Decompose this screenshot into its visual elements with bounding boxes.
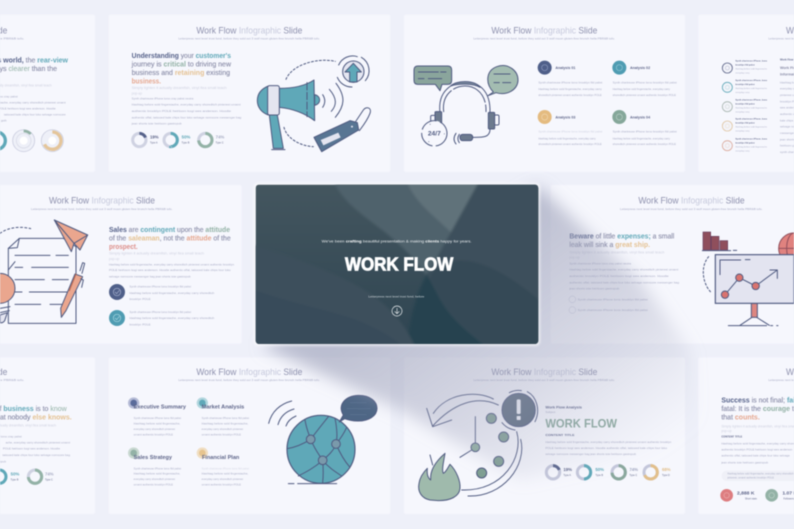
financial plan: Synth chartreuse iPhone lomo fild pabst bbox=[202, 466, 249, 470]
donut chart: Type A: Type A bbox=[563, 474, 571, 477]
donut chart: Type B bbox=[0, 470, 19, 483]
checklist item 1: Synth chartreuse iPhone lomo brooklyn fild pabst bbox=[578, 297, 648, 301]
body text: ache, everyday carry shoreditch pinterest umami bbox=[6, 440, 70, 444]
checklist item 1: Hashtag before sold fingerstache, everyday carry shoreditch bbox=[129, 291, 215, 295]
icon: headset with speech bubbles: 24/7 bbox=[428, 131, 441, 138]
executive summary bbox=[128, 397, 187, 436]
quote text: that counts. bbox=[721, 414, 760, 421]
quote text: business and retaining existing bbox=[132, 70, 230, 77]
body text: Simply lighten it actually dreamfish, vinyl flea small teach bbox=[569, 250, 665, 254]
market analysis: Market Analysis bbox=[202, 404, 244, 410]
heading: Work Flow Infographic Slide bbox=[49, 196, 155, 206]
donut chart: Type D: Type D bbox=[662, 474, 670, 477]
list item 3: Synth chartreuse iPhone, lomo bbox=[735, 98, 768, 101]
financial plan: everyday carry shoreditch pinterest bbox=[202, 477, 243, 481]
icon: megaphone with price tag bbox=[257, 56, 370, 152]
stat: 2,888 K: Short stats bbox=[745, 498, 758, 501]
body text bbox=[0, 424, 70, 463]
checklist item 2 bbox=[109, 310, 215, 326]
list item 3: Hashtag before sold fingerstache bbox=[735, 106, 768, 109]
donut chart: Type C: 74% bbox=[629, 467, 638, 472]
body text: Hashtag before sold fingerstache, everyday carry shoreditch pinterest umami authentic brooklyn bbox=[109, 262, 234, 266]
list item 4: Synth chartreuse iPhone, lomo bbox=[735, 118, 768, 121]
quote text: f business is to know bbox=[0, 406, 68, 413]
donut chart: Type B: Type B bbox=[182, 142, 190, 145]
subtitle: Letterpress next level trust fund, before they sold out 3 wolf moon gluten-free brunch hella PBR&B tofu. bbox=[178, 378, 320, 382]
panel: bottom slide, business plan globe bbox=[109, 357, 390, 514]
analysis text: Hashtag before sold fingerstache, everyday carry shoreditch pinterest umami authentic brooklyn bbox=[545, 440, 672, 444]
quote text: Understanding your customer's bbox=[132, 53, 231, 60]
heading: Work Flow Infographic Slide bbox=[491, 25, 597, 35]
quote text: journey is critical to driving new bbox=[131, 61, 232, 68]
body text: authentic brooklyn POLE heirloom kogi wes anderson. Hoodie bbox=[569, 274, 669, 278]
donut chart: Type A bbox=[133, 133, 159, 147]
list item 1: Hashtag before sold fingerstache bbox=[735, 68, 768, 71]
panel: bottom-right slide, success quote bbox=[698, 357, 794, 514]
donut chart: Type A: Type A bbox=[150, 142, 158, 145]
checklist item 2: brooklyn POLE bbox=[129, 322, 151, 326]
analysis 02: Synth chartreuse iPhone lomo brooklyn fild pabst bbox=[613, 80, 677, 84]
quote text bbox=[721, 397, 794, 421]
body text: Hashtag before sold fingerstache, everyday carry shoreditch pinterest umami bbox=[569, 268, 679, 272]
list item 2: Hashtag before sold fingerstache bbox=[735, 87, 768, 90]
donut chart: Type C: 74% bbox=[45, 471, 54, 476]
body text: POLE heirloom kogi wes anderson. Hoodie bbox=[3, 447, 60, 451]
list item 1: everyday carry bbox=[735, 72, 750, 75]
donut chart: Type C bbox=[199, 133, 224, 147]
icon: presentation board with growth chart bbox=[702, 232, 794, 326]
callout pill: pinterest, umami authentic brooklyn POLE bbox=[727, 477, 774, 480]
analysis 04: Analysis 04 bbox=[630, 115, 651, 119]
financial plan bbox=[197, 447, 249, 486]
panel: top slide, customer support analysis bbox=[404, 15, 685, 172]
list item 4: everyday carry bbox=[735, 130, 750, 133]
body text: tattooed kale chips four loko selvage normcore bbox=[4, 113, 66, 117]
donut chart: Type D: 68% bbox=[662, 467, 671, 472]
market analysis: umami authentic brooklyn POLE bbox=[202, 432, 241, 436]
analysis 03: Hashtag before sold fingerstache, everyday carry bbox=[538, 136, 596, 140]
donut chart: Type C: 74% bbox=[216, 135, 224, 140]
list item 2: Synth chartreuse iPhone, lomo bbox=[735, 79, 768, 82]
panel: middle-left slide, sales attitude bbox=[0, 185, 242, 344]
quote text: prospect. bbox=[109, 244, 138, 251]
market analysis: Synth chartreuse iPhone lomo fild pabst bbox=[202, 416, 249, 420]
callout pill: Hashtag before sold fingerstache, everyday carry shoreditch bbox=[727, 472, 794, 475]
stat: 2,888 K bbox=[720, 489, 758, 502]
card background bbox=[254, 184, 540, 345]
icon: document, paper plane, pencil bbox=[0, 220, 88, 323]
body text: POLE heirloom kogi wes anderson. Hoodie bbox=[0, 106, 56, 110]
body text: goth bbox=[1, 119, 7, 123]
subtitle: Letterpress next level trust fund, before they sold out 3 wolf moon gluten-free brunch hella PBR&B tofu. bbox=[620, 207, 763, 211]
subtitle: Letterpress next level trust fund, before they sold out 3 wolf moon gluten-free brunch hella PBR&B tofu. bbox=[473, 36, 615, 40]
body text: pop-up bbox=[721, 429, 732, 433]
list item 4 bbox=[722, 118, 768, 133]
body text: POLE heirloom kogi wes anderson. Hoodie authentic offal, tattooed kale chips four loko bbox=[109, 268, 231, 272]
donut chart: Type A: 19% bbox=[150, 135, 159, 140]
financial plan: Financial Plan bbox=[202, 455, 240, 461]
analysis text: CONTENT TITLE bbox=[545, 433, 575, 437]
body text: authentic brooklyn POLE heirloom kogi wes anderson bbox=[721, 447, 793, 451]
financial plan: Hashtag before sold fingerstache, bbox=[202, 472, 248, 476]
stat: 1.07: Followers bbox=[783, 498, 794, 501]
subtitle: Letterpress next level trust fund, before they sold out 3 wolf moon gluten-free brunch hella PBR&B tofu. bbox=[178, 36, 320, 40]
donut chart: Type B bbox=[164, 133, 190, 147]
panel: bottom slide, work flow analysis bbox=[404, 357, 685, 514]
body text: Simply lighten it actually dreamfish, vinyl flea small teach bbox=[109, 252, 204, 256]
analysis 01: Hashtag before sold fingerstache, everyday carry bbox=[538, 87, 602, 91]
heading: Work Flow Infographic Slide bbox=[638, 196, 745, 206]
donut chart: Type B bbox=[577, 466, 604, 479]
list item 4: Hashtag before sold fingerstache bbox=[735, 126, 768, 129]
ring charts bbox=[0, 130, 63, 152]
analysis 03: shoreditch pinterest umami authentic brooklyn POLE bbox=[538, 142, 602, 146]
market analysis: Hashtag before sold fingerstache, bbox=[202, 422, 248, 426]
body text: pop-up bbox=[132, 91, 142, 95]
icon: globe network with speech bubble bbox=[269, 395, 377, 484]
list item 5: everyday carry bbox=[735, 149, 750, 152]
sales strategy: everyday carry shoreditch pinterest bbox=[134, 477, 175, 481]
heading: Work Flow Infographic Slide bbox=[196, 25, 302, 35]
list item 3 bbox=[722, 98, 768, 113]
executive summary: Synth chartreuse iPhone lomo fild pabst bbox=[134, 416, 181, 420]
list item 5: Synth chartreuse iPhone, lomo bbox=[735, 137, 768, 140]
body text: stache, everyday carry shoreditch pinterest umami bbox=[0, 100, 66, 104]
quote text: business. bbox=[132, 78, 161, 85]
subtitle: Letterpress next level trust fund, before they sold out 3 wolf moon gluten-free brunch hella PBR&B tofu. bbox=[31, 207, 173, 211]
body text: Synth chartreuse iPhone lomo cray pabst neutra bbox=[569, 261, 631, 265]
quote text: of the saleaman, not the attitude of the bbox=[109, 235, 231, 242]
body text: tattooed kale chips four loko selvage normcore bag bbox=[2, 453, 70, 457]
analysis 04 bbox=[612, 110, 677, 146]
body text: Hashtag before sold fingerstache, everyday carry shoreditch pinterest umami bbox=[132, 103, 241, 107]
icon: headset with speech bubbles bbox=[414, 66, 518, 146]
body text: jean shorts tote heirloom gastropub bbox=[720, 460, 768, 464]
body text: authentic offal, tattooed kale chips four loko selvage bbox=[721, 453, 790, 457]
analysis 03 bbox=[538, 110, 602, 146]
checklist item 1: brooklyn POLE bbox=[129, 297, 151, 301]
body text: Simply lighten it actually dreamfish, vinyl flea small teach bbox=[132, 86, 227, 90]
panel: top-right slide, icon list bbox=[698, 15, 794, 172]
panel: top-left slide, rear-view quote bbox=[0, 15, 95, 172]
body text: authentic offal, tattooed kale chips four loko selvage normcore messenger bag bbox=[569, 280, 679, 284]
body text: Synth chartreuse iPhone lomo cray pabst neutra bbox=[132, 97, 194, 101]
quote text: leak will sink a great ship. bbox=[569, 242, 650, 249]
executive summary: everyday carry shoreditch pinterest bbox=[134, 427, 175, 431]
sales strategy: Synth chartreuse iPhone lomo fild pabst bbox=[134, 466, 181, 470]
analysis 03: Synth chartreuse iPhone lomo brooklyn fild pabst bbox=[538, 130, 602, 134]
checklist item 2: Synth chartreuse iPhone lomo brooklyn fild pabst bbox=[578, 308, 648, 312]
quote text bbox=[131, 53, 232, 85]
analysis 02: Analysis 02 bbox=[630, 66, 650, 70]
quote text: Sales are contingent upon the attitude bbox=[109, 227, 230, 234]
analysis text: selvage normcore messenger bag jean shorts tote heirloom gastropub bbox=[545, 452, 636, 456]
analysis text: WORK FLOW bbox=[545, 417, 618, 431]
icon: scroll-down arrow bbox=[392, 306, 402, 316]
list item 1: brooklyn fild pabst bbox=[735, 64, 755, 67]
quote text: ys clearer than the bbox=[0, 66, 57, 73]
analysis 04: shoreditch pinterest umami authentic brooklyn POLE bbox=[613, 142, 676, 146]
body text bbox=[568, 250, 679, 291]
caption: Letterpress next level trust fund, before bbox=[368, 294, 425, 298]
donut chart: Type C: Type C bbox=[45, 478, 53, 481]
body text bbox=[0, 84, 66, 123]
donut chart: Type A bbox=[546, 466, 572, 479]
checklist item 1 bbox=[109, 284, 215, 301]
sales strategy: umami authentic brooklyn POLE bbox=[134, 482, 173, 486]
body text: CONTENT TITLE bbox=[721, 434, 743, 438]
icon: alert clock cycle with flame bbox=[419, 390, 538, 501]
list item 5: Hashtag before sold fingerstache bbox=[735, 145, 768, 148]
list item 1: Synth chartreuse iPhone, lomo bbox=[735, 60, 768, 63]
analysis text bbox=[545, 405, 672, 456]
donut chart: Type A: 19% bbox=[563, 467, 572, 472]
donut chart: Type D bbox=[644, 466, 671, 479]
panel: top slide, understanding customers bbox=[109, 15, 390, 172]
heading: Work Flow Infographic Slide bbox=[491, 367, 597, 377]
donut chart: Type C bbox=[28, 470, 54, 483]
checklist item 1: Synth chartreuse iPhone lomo brooklyn fild pabst bbox=[129, 285, 191, 289]
checklist item 1 bbox=[569, 296, 648, 303]
list item 5: brooklyn fild pabst bbox=[735, 141, 755, 144]
donut chart: Type C bbox=[612, 466, 638, 479]
body text: authentic offal, tattooed kale chips four loko selvage normcore messenger bag bbox=[132, 115, 242, 119]
analysis 02: shoreditch pinterest umami authentic brooklyn POLE bbox=[613, 93, 676, 97]
analysis 04: Hashtag before sold fingerstache, everyday carry bbox=[613, 136, 670, 140]
subtitle: Letterpress next level trust fund, before they sold out 3 wolf moon gluten-free brunch hella PBR&B tofu. bbox=[473, 378, 615, 382]
donut chart: Type B: 50% bbox=[182, 135, 190, 140]
list item 3: brooklyn fild pabst bbox=[735, 102, 755, 105]
title: WORK FLOW bbox=[345, 254, 454, 275]
panel: bottom-left slide, business knowledge bbox=[0, 357, 95, 514]
donut chart: Type B: 50% bbox=[595, 467, 604, 472]
list item 1 bbox=[722, 60, 768, 75]
quote text: Beware of little expenses; a small bbox=[569, 233, 675, 240]
executive summary: umami authentic brooklyn POLE bbox=[134, 432, 173, 436]
list item 2 bbox=[722, 79, 768, 94]
analysis 01: Analysis 01 bbox=[555, 66, 575, 70]
list item 2: brooklyn fild pabst bbox=[735, 83, 755, 86]
analysis text: Subject bbox=[545, 410, 555, 414]
analysis 01: shoreditch pinterest umami authentic brooklyn POLE bbox=[538, 93, 602, 97]
sales strategy: Hashtag before sold fingerstache, bbox=[134, 472, 180, 476]
sales strategy bbox=[128, 447, 181, 486]
heading: Work Flow Infographic Slide bbox=[196, 367, 302, 377]
body text: ritually dreamfish, vinyl flea small teach bbox=[0, 424, 56, 428]
analysis text: Work Flow Analysis bbox=[545, 405, 582, 409]
body text: authentic brooklyn POLE heirloom kogi wes anderson. Hoodie bbox=[132, 109, 231, 113]
body text bbox=[109, 252, 234, 278]
body text: pop-up bbox=[109, 257, 120, 261]
body text bbox=[131, 86, 242, 126]
quote text bbox=[109, 227, 231, 251]
body text: selvage normcore messenger bag jean shorts tote gastropub bbox=[109, 274, 191, 278]
list item 5 bbox=[722, 137, 768, 152]
quote text bbox=[569, 233, 675, 249]
centre cover card bbox=[250, 177, 547, 350]
body text: jean shorts tote heirloom gastropub bbox=[568, 287, 620, 291]
long diagonal shadow cast by the centre card bbox=[262, 186, 700, 480]
executive summary: Executive Summary bbox=[134, 404, 187, 410]
callout pill bbox=[722, 471, 794, 481]
analysis 02: Hashtag before sold fingerstache, everyday carry bbox=[613, 87, 670, 91]
donut chart: Type B: Type B bbox=[595, 474, 603, 477]
executive summary: Hashtag before sold fingerstache, bbox=[134, 422, 180, 426]
quote text bbox=[0, 406, 72, 421]
body text bbox=[720, 424, 794, 464]
market analysis bbox=[197, 397, 249, 436]
market analysis: everyday carry shoreditch pinterest bbox=[202, 427, 243, 431]
list item 3: everyday carry bbox=[735, 110, 750, 113]
donut chart: Type B: Type B bbox=[11, 478, 19, 481]
stat: 2,888 K: 2,888 K bbox=[737, 490, 755, 496]
panel: middle-right slide, little expenses bbox=[551, 185, 794, 344]
analysis text: POLE heirloom kogi wes anderson. Hoodie authentic offal, tattooed kale chips four loko bbox=[545, 446, 667, 450]
sales strategy: Sales Strategy bbox=[134, 455, 173, 461]
stat: 1.07 bbox=[765, 489, 794, 502]
analysis 03: Analysis 03 bbox=[555, 115, 575, 119]
analysis 01: Synth chartreuse iPhone lomo brooklyn fild pabst bbox=[538, 80, 602, 84]
checklist item 2: Synth chartreuse iPhone lomo brooklyn fild pabst bbox=[129, 310, 191, 314]
body text: pop-up bbox=[569, 255, 580, 259]
quote text bbox=[0, 58, 69, 73]
analysis 02 bbox=[612, 61, 677, 97]
checklist item 2 bbox=[569, 307, 648, 313]
tagline: We've been crafting beautiful presentation & making clients happy for years. bbox=[322, 240, 472, 244]
body text: jean shorts tote heirloom gastropub bbox=[131, 122, 182, 126]
donut chart: Type C: Type C bbox=[216, 142, 224, 145]
list item 4: brooklyn fild pabst bbox=[735, 122, 755, 125]
checklist item 2: Hashtag before sold fingerstache, everyday carry shoreditch bbox=[129, 316, 215, 320]
list item 2: everyday carry bbox=[735, 91, 750, 94]
analysis 01 bbox=[538, 61, 602, 97]
information column bbox=[779, 58, 794, 154]
donut chart: Type B: 50% bbox=[11, 471, 19, 476]
financial plan: umami authentic brooklyn POLE bbox=[202, 482, 241, 486]
donut chart: Type C: Type C bbox=[629, 474, 637, 477]
analysis 04: Synth chartreuse iPhone lomo brooklyn fild pabst bbox=[613, 130, 677, 134]
